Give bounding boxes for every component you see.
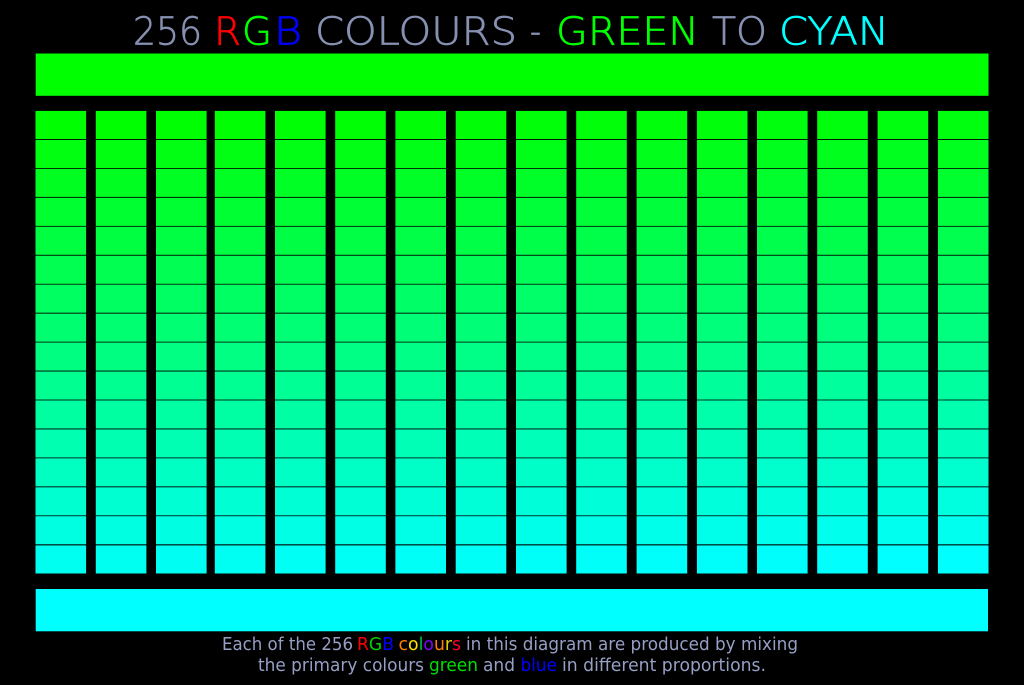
- bottom bar: pure cyan: [36, 589, 988, 631]
- column 9: [516, 111, 567, 574]
- caption: green: [429, 656, 478, 676]
- caption: Each of the 256: [222, 635, 353, 655]
- title: [133, 10, 889, 54]
- column 7: [395, 111, 446, 574]
- column 5: [275, 111, 326, 574]
- column 6: [335, 111, 386, 574]
- column 10: [576, 111, 627, 574]
- title: 256: [133, 10, 202, 54]
- column 4: [215, 111, 265, 574]
- column 16: [938, 111, 988, 574]
- caption: in this diagram are produced by mixing: [466, 635, 798, 655]
- top bar: pure green: [36, 54, 988, 96]
- column 14: [817, 111, 868, 574]
- caption: blue: [520, 656, 557, 676]
- title: TO: [712, 10, 767, 54]
- caption: and: [483, 656, 515, 676]
- title: B: [274, 10, 302, 54]
- column 11: [637, 111, 687, 574]
- column 15: [878, 111, 928, 574]
- title: GREEN: [556, 10, 699, 54]
- column 2: [96, 111, 146, 574]
- title: COLOURS: [315, 10, 517, 54]
- title: -: [530, 10, 541, 54]
- caption: the primary colours: [258, 656, 424, 676]
- column 12: [697, 111, 748, 574]
- title: CYAN: [779, 10, 889, 54]
- title: R: [214, 10, 241, 54]
- column 8: [456, 111, 506, 574]
- caption: RGB: [357, 635, 394, 655]
- caption: [222, 635, 798, 676]
- caption: colours: [398, 635, 461, 655]
- title: G: [242, 10, 272, 54]
- column 1: [36, 111, 86, 574]
- caption: in different proportions.: [562, 656, 766, 676]
- column 3: [156, 111, 207, 574]
- column 13: [757, 111, 808, 574]
- colour grid: 256 swatches: [36, 111, 988, 574]
